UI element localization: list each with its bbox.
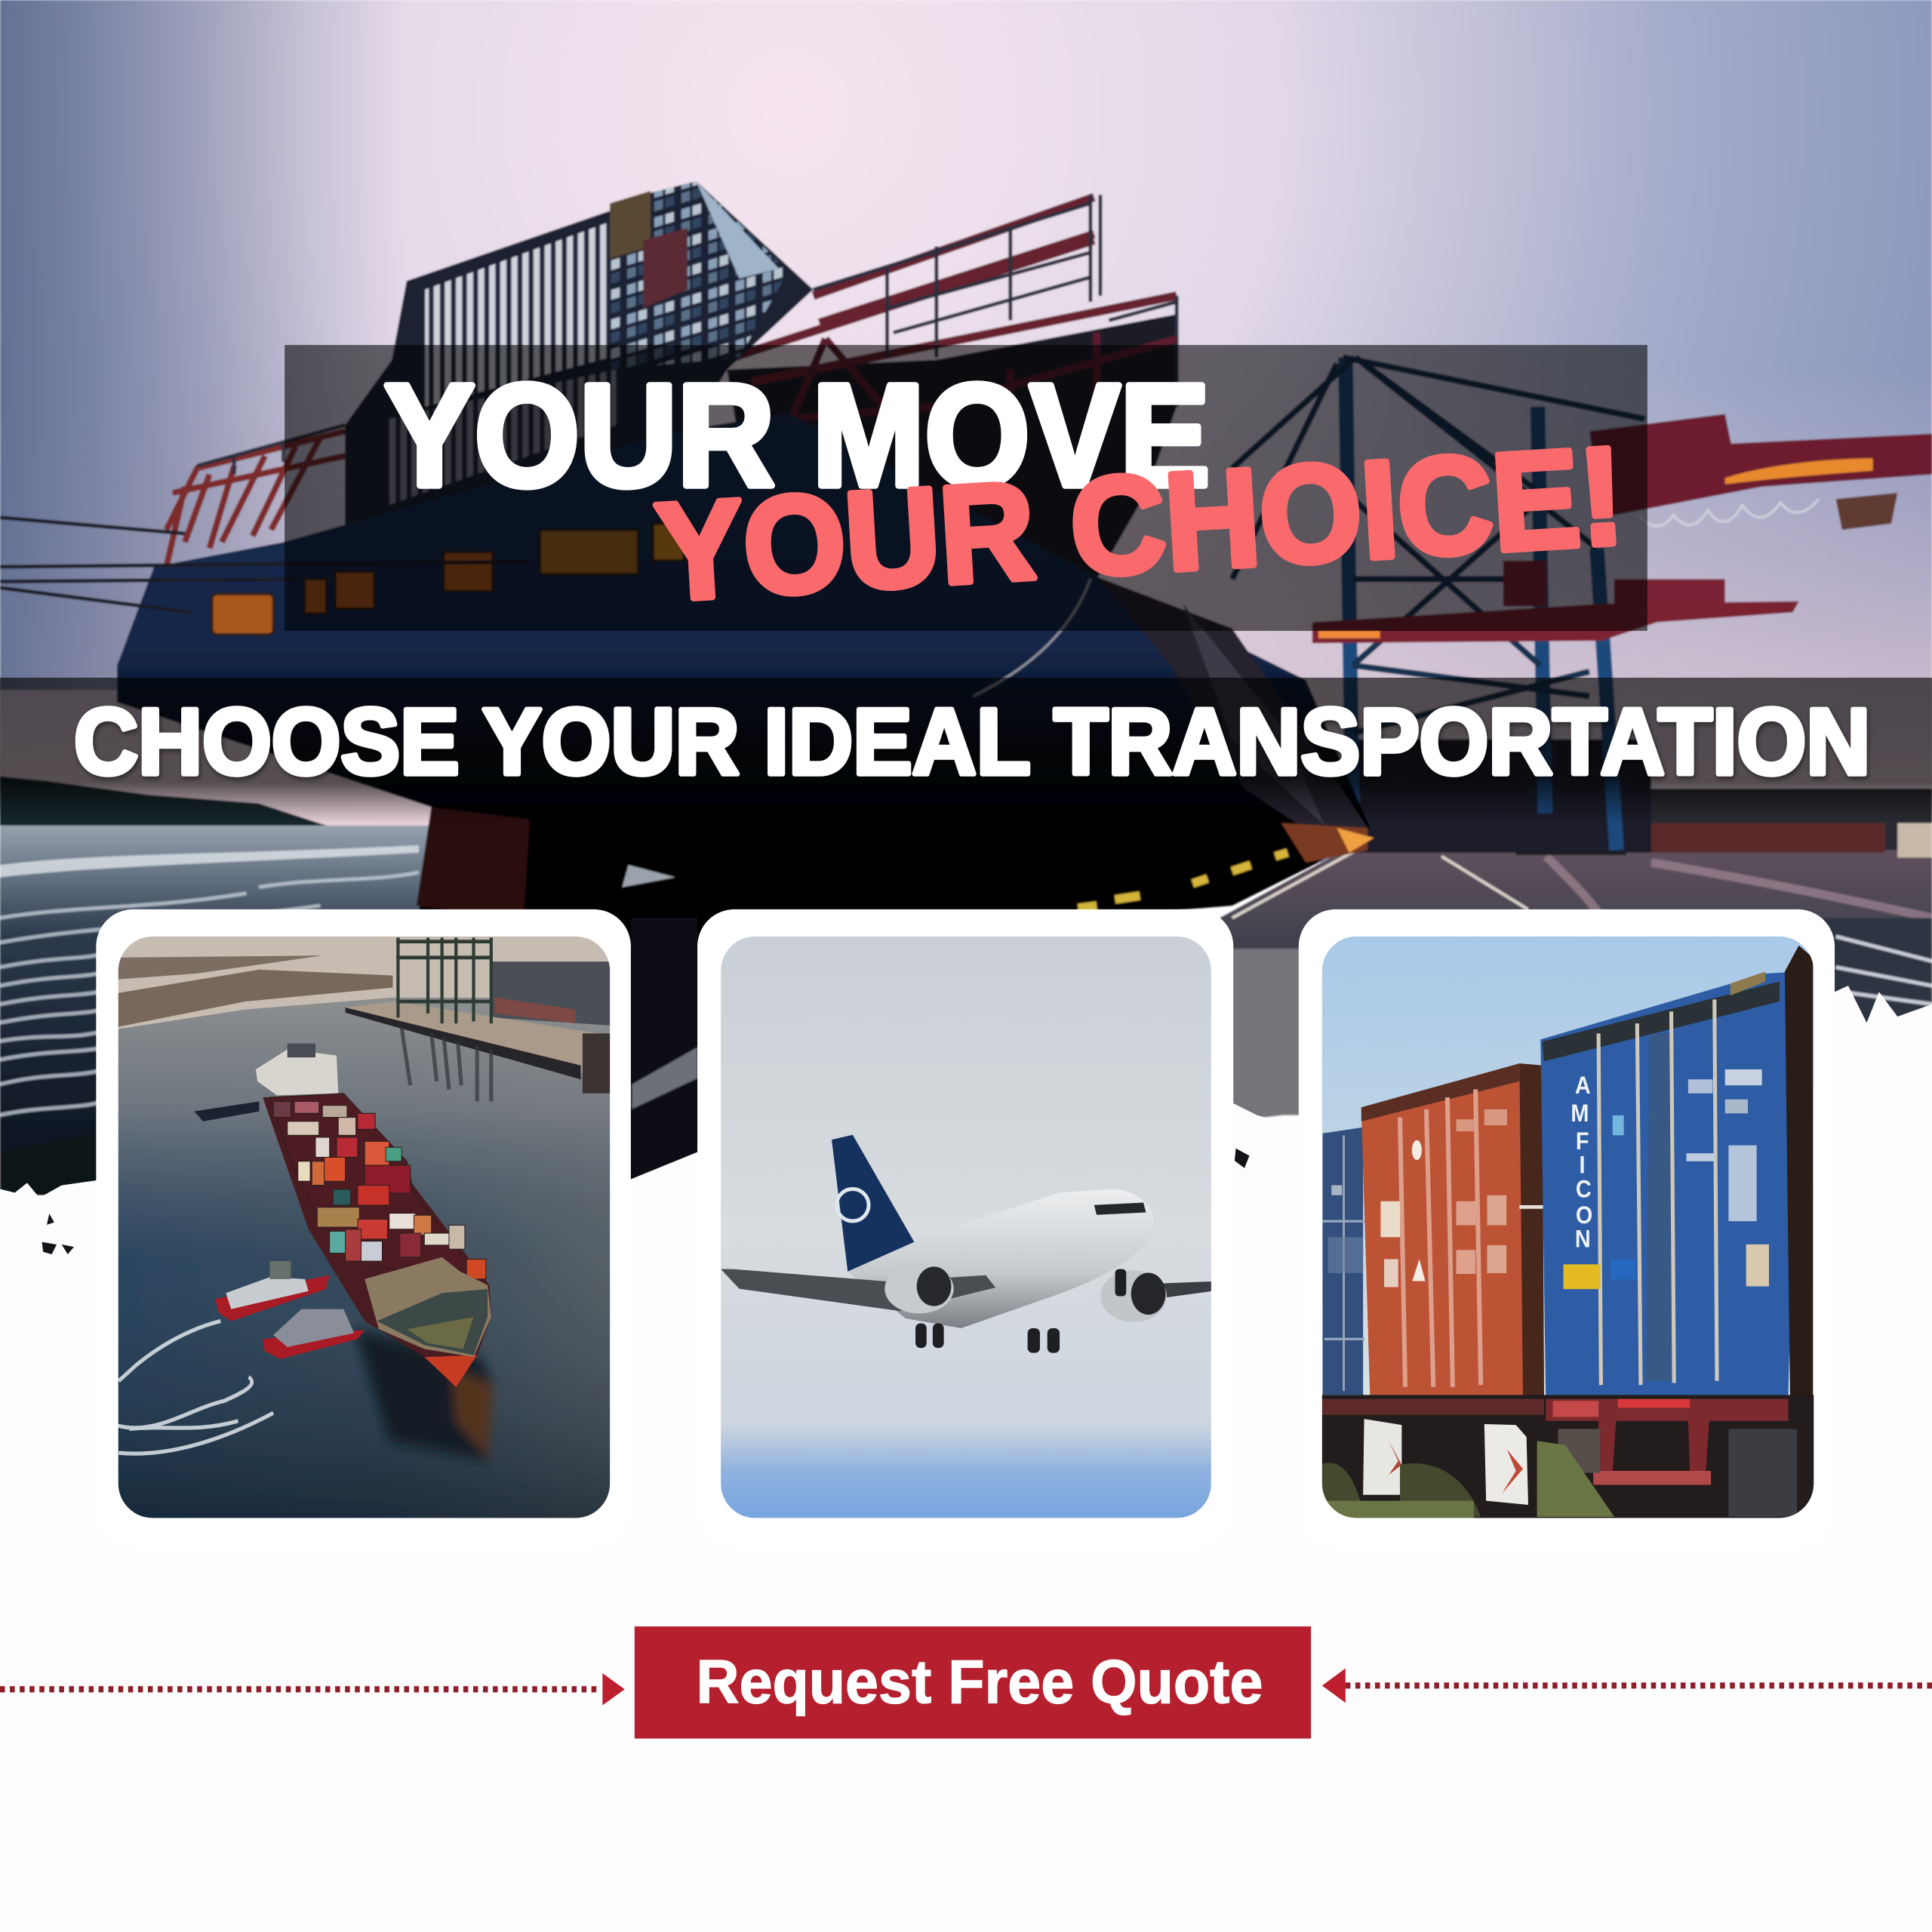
card: road freight: [1299, 909, 1835, 1550]
tail fin: [832, 1135, 914, 1272]
hull windows: [212, 524, 684, 635]
container stack on ship: [345, 181, 814, 542]
sky: [0, 0, 1932, 863]
container brand lettering: N: [1575, 1225, 1591, 1253]
dock road: [1220, 844, 1932, 1121]
card: sea freight: [96, 909, 631, 1550]
tugs: [215, 1275, 330, 1321]
deck structure backing: [727, 314, 1177, 579]
card frame: [96, 909, 631, 1550]
container brand lettering: C: [1576, 1175, 1592, 1203]
blue container: [1540, 971, 1799, 1399]
crane booms: [1312, 414, 1932, 643]
quay crane: legs and bracing: [1232, 357, 1645, 851]
subtitle backdrop band: [0, 678, 1932, 823]
container brand lettering: M: [1571, 1099, 1589, 1127]
road signs: [1363, 1419, 1401, 1495]
sea: [0, 826, 444, 1195]
container deck: [269, 1094, 488, 1285]
container brand lettering: O: [1576, 1201, 1592, 1229]
landing gear: [915, 1269, 1126, 1353]
arrow: left pointing to button: [0, 1673, 625, 1706]
container labels: [1564, 1264, 1600, 1289]
photo: container ship with tugs: [115, 934, 614, 1524]
tug wakes: [115, 1321, 273, 1454]
horizon buildings and trucks: [1355, 740, 1932, 857]
heading: your choice: YOUR CHOICE!: [652, 417, 1628, 629]
card frame: [1299, 909, 1835, 1550]
ship hull: [263, 1094, 491, 1387]
distant headland: [0, 777, 331, 828]
container brand lettering: I: [1580, 1151, 1586, 1179]
far wing: [1164, 1281, 1211, 1298]
bow flare: [974, 577, 1374, 863]
heading: your move: YOUR MOVE: [384, 354, 1210, 516]
left blue container: [1323, 1128, 1363, 1395]
fuselage: [848, 1189, 1155, 1328]
torn white lower panel: [0, 986, 1932, 1932]
container brand lettering: A: [1575, 1071, 1591, 1099]
grass: [1319, 1463, 1481, 1517]
chassis: [1319, 1395, 1814, 1518]
engines: [884, 1264, 1167, 1322]
card frame: [697, 909, 1233, 1550]
headline backdrop band: [285, 345, 1647, 631]
photo: shipping containers on trailers: [1319, 934, 1818, 1524]
bow deck: [365, 1257, 491, 1357]
orange container: [1361, 1063, 1544, 1399]
container brand lettering: F: [1576, 1127, 1589, 1155]
arrow: right pointing to button: [1322, 1669, 1932, 1703]
hull lower section: [417, 807, 697, 1179]
mooring lines: [0, 518, 530, 612]
call to action button: [635, 1626, 1311, 1739]
background: port scene with cargo ship: [0, 0, 1932, 1195]
superstructure: [256, 1050, 338, 1095]
near wing: [721, 1269, 995, 1311]
ink specks at torn edge: [42, 1149, 1250, 1254]
subtitle: CHOOSE YOUR IDEAL TRANSPORTATION: [74, 690, 1870, 794]
card: air freight: [697, 909, 1233, 1550]
button label: Request Free Quote: [696, 1647, 1263, 1716]
quay bollards: [1078, 853, 1287, 908]
photo: airplane in flight: [721, 937, 1211, 1518]
deck gantries: [166, 195, 1177, 567]
ship hull: [117, 413, 1371, 1183]
